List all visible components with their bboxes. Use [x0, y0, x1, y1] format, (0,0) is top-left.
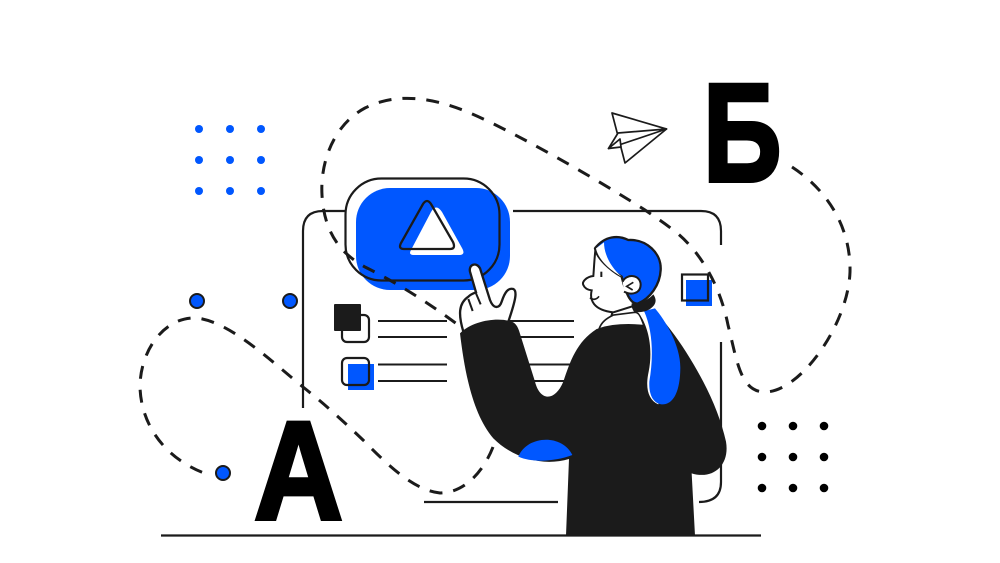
hair tie: [632, 294, 656, 312]
dashed path lower: [140, 318, 493, 493]
ponytail blue: [644, 308, 680, 404]
window panel outline: [303, 211, 721, 502]
hair: [595, 237, 661, 304]
ear detail: [627, 282, 633, 290]
icon: white triangle: [410, 208, 463, 255]
neck: [611, 312, 612, 316]
elbow patch: [518, 440, 572, 461]
dashed path upper: [322, 98, 850, 392]
person: [460, 237, 727, 536]
eye: [598, 272, 604, 277]
body: [460, 312, 727, 536]
checkbox: black: [334, 304, 369, 342]
paper plane: [608, 113, 666, 163]
ground line: [161, 534, 761, 537]
blue nodes: [190, 294, 297, 480]
checkbox: blue: [342, 358, 374, 390]
list rows: [334, 304, 574, 390]
ear: [623, 276, 641, 294]
icon: outline triangle: [400, 201, 454, 249]
button outline: [346, 178, 500, 280]
face: [583, 248, 647, 312]
letter A: А: [254, 393, 343, 549]
ponytail: [638, 308, 680, 404]
ponytail highlight: [638, 312, 663, 404]
letter Б: Б: [703, 54, 781, 211]
square right: [682, 274, 712, 306]
blue dot grid: [195, 125, 265, 195]
list lines: [378, 321, 574, 381]
hair highlight: [596, 242, 622, 277]
finger creases: [468, 293, 481, 311]
smile: [590, 296, 599, 299]
button: [346, 178, 510, 290]
hand: [460, 265, 516, 332]
black dot grid: [758, 422, 828, 492]
collar: [599, 312, 644, 329]
button fill: [356, 188, 510, 290]
